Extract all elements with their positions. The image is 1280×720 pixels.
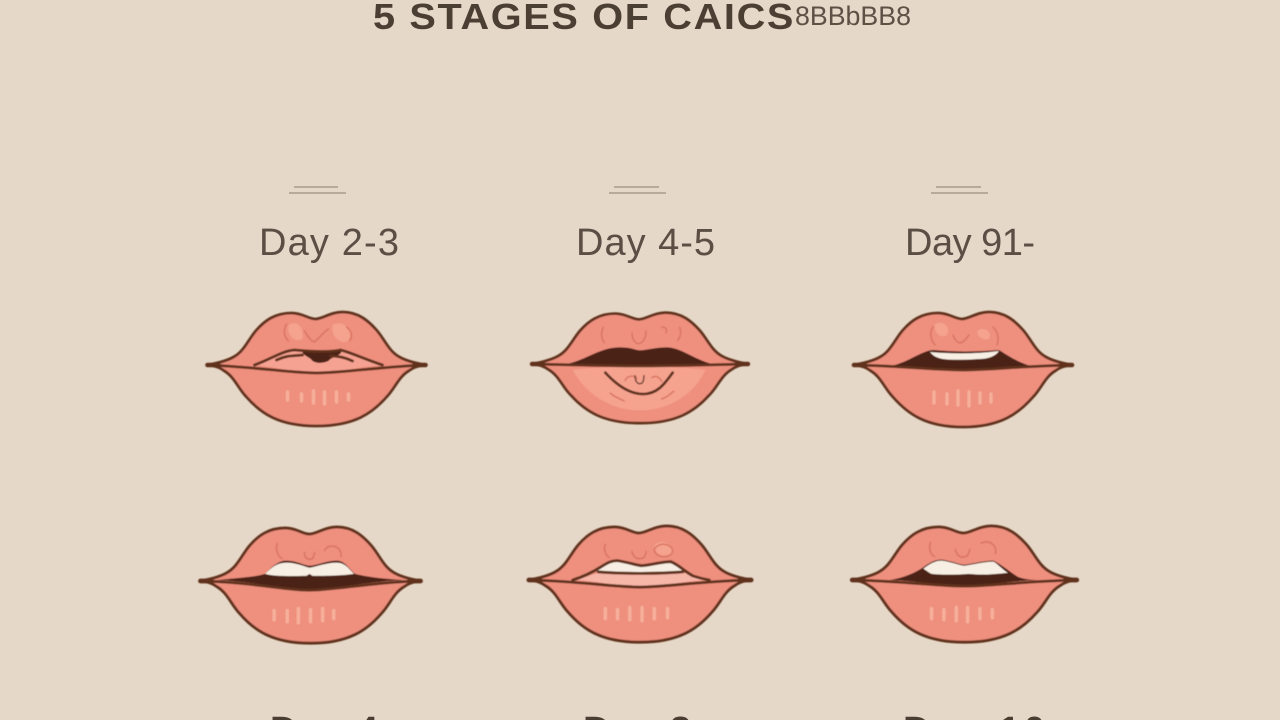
lips: stage 5 [529,526,751,642]
heading: Day 91-: Day 91- [905,222,1035,264]
title: 8BBbBB8 [795,1,911,31]
lips: stage 4 [200,527,421,643]
lips: stage 1 [208,312,426,426]
lips: stage 2 [532,313,748,423]
lips: stage 3 [854,312,1072,427]
heading: Day 2-3: Day 2-3 [259,222,399,264]
heading: Day 91- [905,187,1035,264]
heading: Day 2-3 [259,187,399,264]
heading: Day 4-5 [576,187,715,264]
heading: Day 4-5: Day 4-5 [576,222,715,264]
lips: stage 6 [852,526,1077,642]
